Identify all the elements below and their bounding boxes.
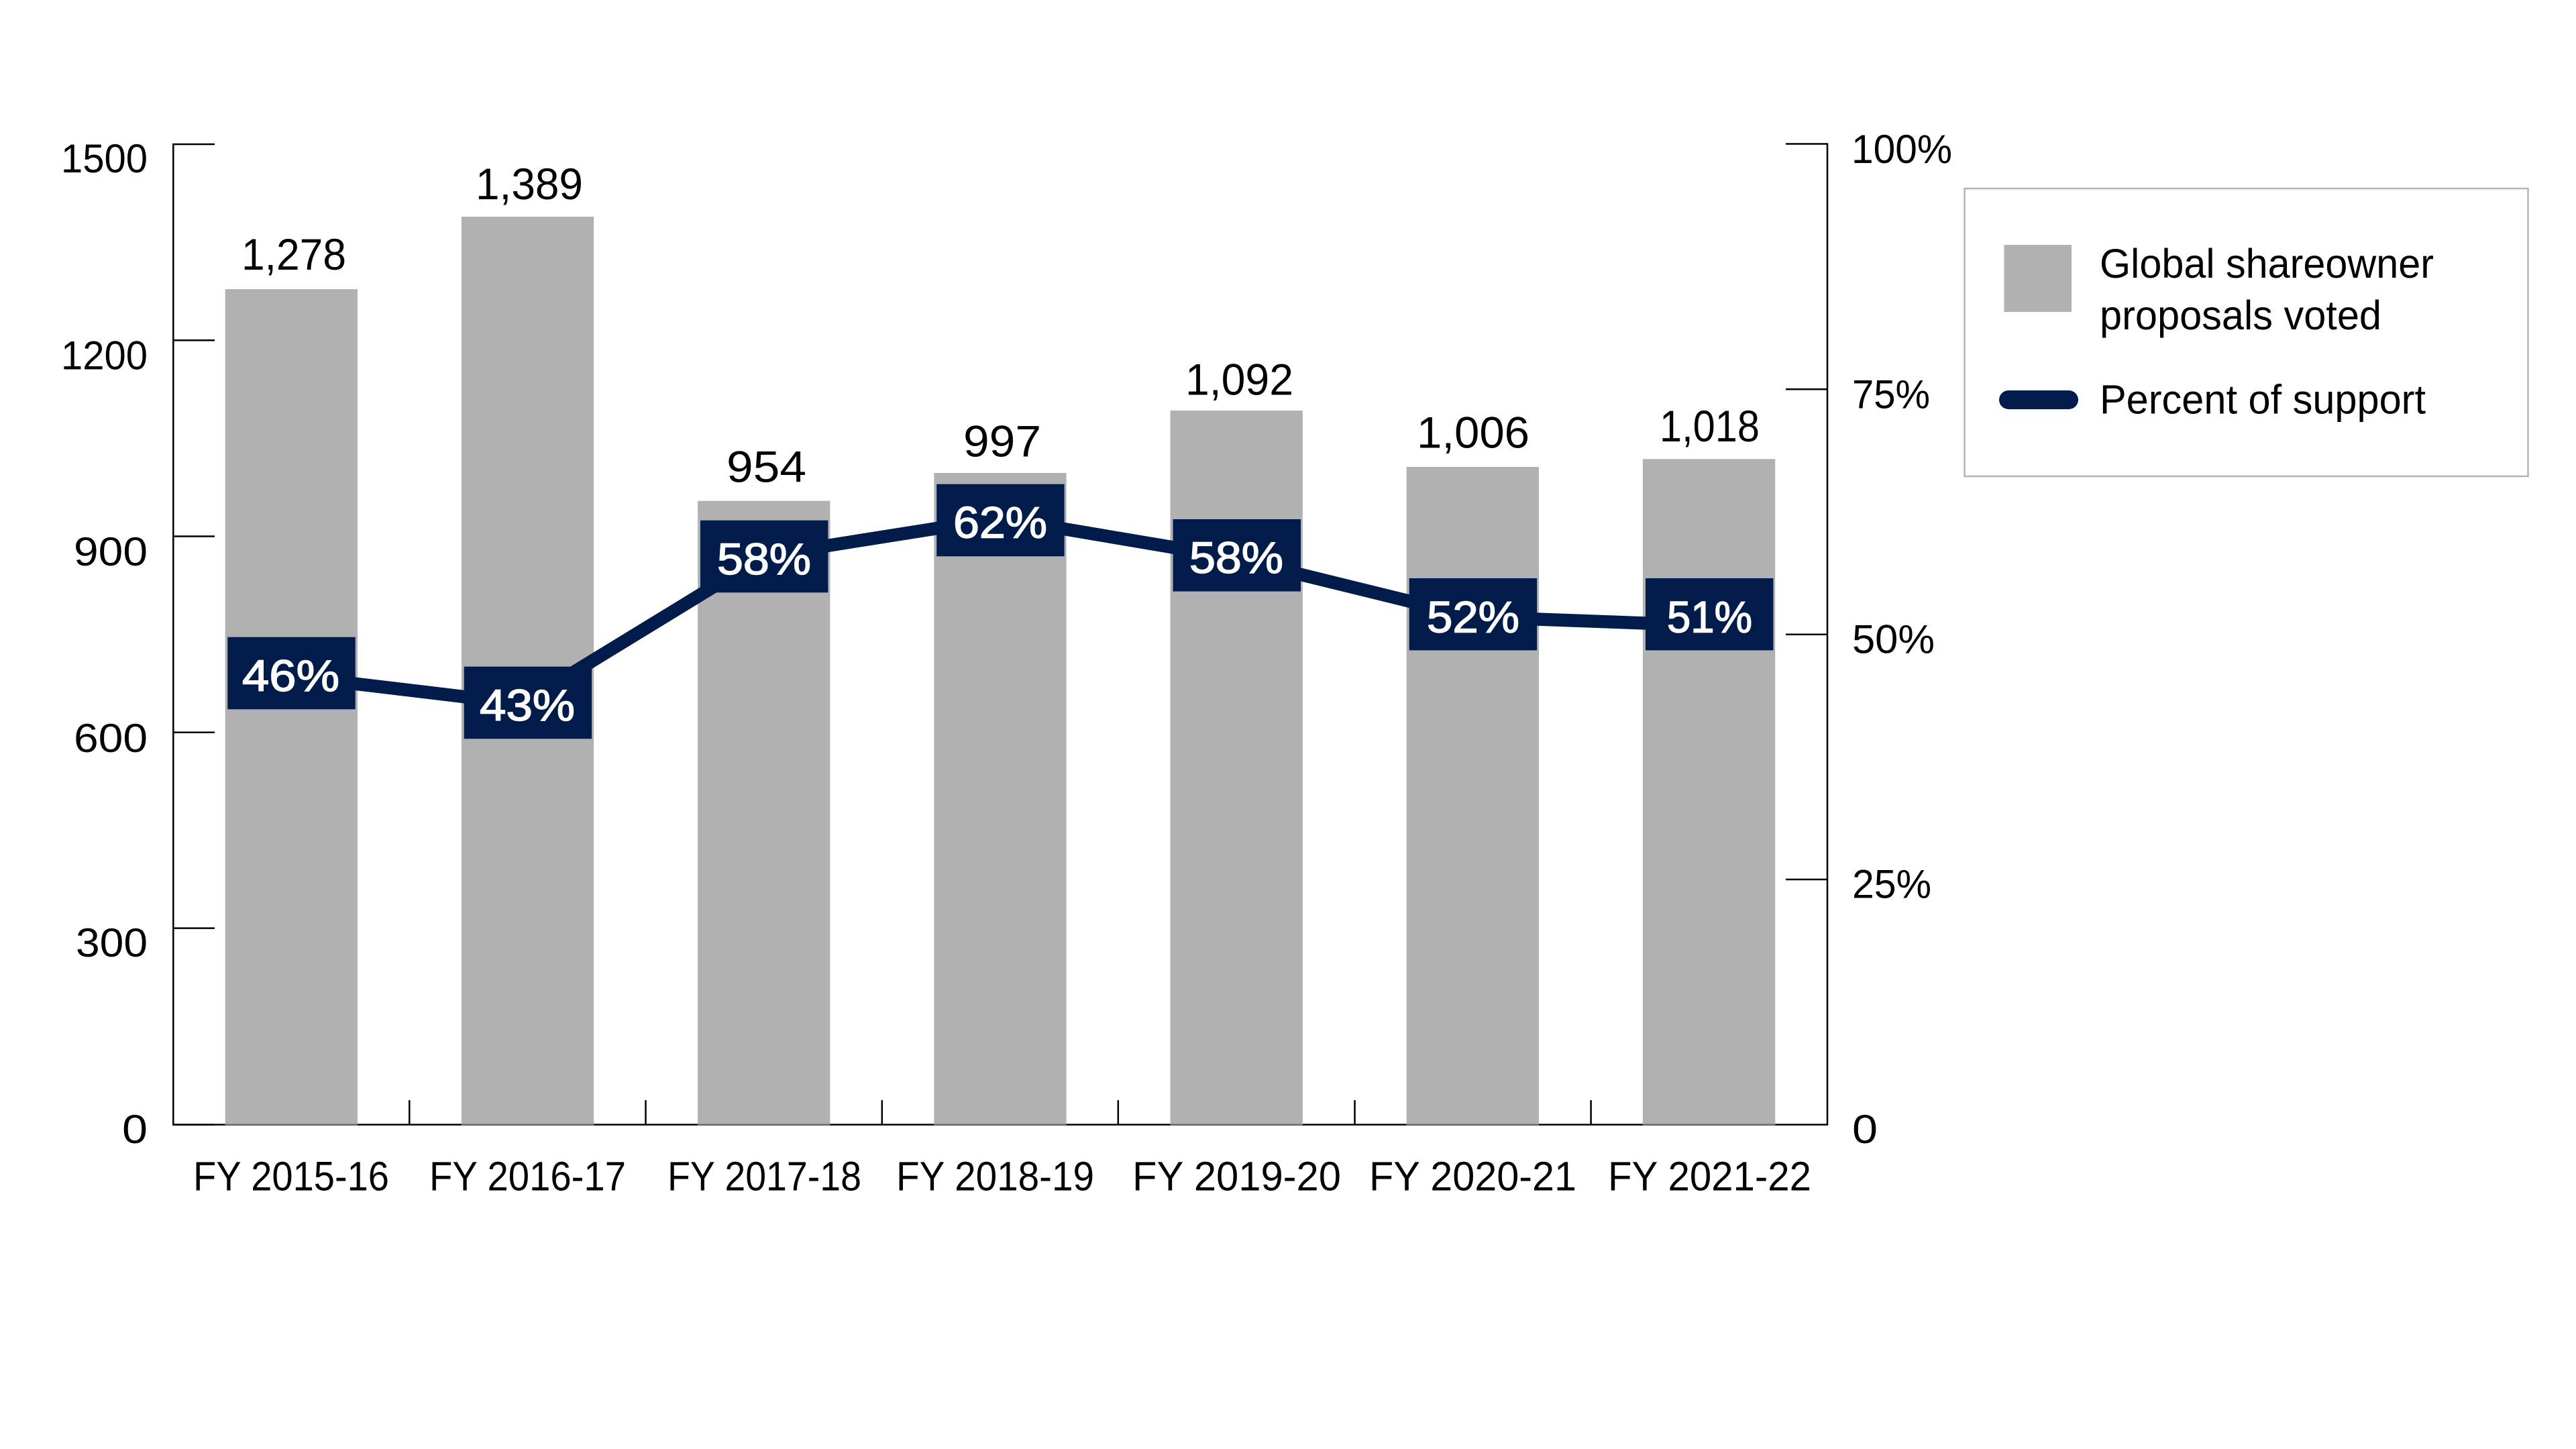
bar value labels: 1,278 [241, 229, 346, 279]
bar value labels: 1,018 [1660, 401, 1760, 451]
left axis labels [61, 136, 148, 1152]
right axis labels: 75% [1852, 372, 1930, 417]
category labels [193, 1153, 1811, 1199]
percent labels: 52% [1427, 592, 1519, 641]
category labels: FY 2015-16 [193, 1153, 389, 1199]
category labels: FY 2019-20 [1132, 1153, 1341, 1199]
legend swatch: line [1999, 390, 2078, 409]
legend label: line: Percent of support [2100, 377, 2426, 423]
percent labels: 43% [480, 680, 575, 730]
category labels: FY 2020-21 [1369, 1153, 1576, 1199]
left axis labels: 1200 [61, 333, 148, 378]
bar value labels: 954 [727, 441, 806, 491]
category labels: FY 2021-22 [1608, 1153, 1811, 1199]
right axis labels: 100% [1851, 127, 1952, 172]
category labels: FY 2016-17 [429, 1153, 626, 1199]
left axis labels: 0 [122, 1107, 148, 1152]
percent labels: 58% [1189, 533, 1283, 582]
left axis labels: 600 [74, 716, 148, 761]
percent labels [242, 498, 1752, 730]
category labels: FY 2017-18 [667, 1153, 861, 1199]
legend label: bars second line: proposals voted [2100, 292, 2381, 338]
bar value labels: 1,389 [476, 159, 583, 209]
bar value labels: 997 [963, 416, 1041, 466]
right axis labels [1851, 127, 1952, 1152]
percent labels: 62% [953, 498, 1047, 547]
right axis labels: 25% [1852, 861, 1931, 906]
percent labels: 46% [242, 651, 339, 700]
legend box [1964, 189, 2528, 476]
category labels: FY 2018-19 [896, 1153, 1094, 1199]
bar value labels: 1,092 [1185, 354, 1293, 404]
left axis labels: 1500 [61, 136, 148, 181]
axes frame and tick marks [173, 144, 1827, 1124]
legend [1964, 189, 2528, 476]
bars: proposals voted by year [225, 217, 1775, 1126]
right axis labels: 0 [1852, 1107, 1878, 1152]
percent data boxes [227, 484, 1773, 739]
left axis labels: 300 [76, 920, 148, 965]
bar value labels: 1,006 [1417, 408, 1529, 458]
percent labels: 58% [717, 534, 811, 584]
right axis labels: 50% [1852, 616, 1935, 661]
baseline shading under bars [225, 1124, 1775, 1126]
line: percent of support [291, 518, 1709, 704]
left axis labels: 900 [74, 529, 148, 574]
percent labels: 51% [1667, 592, 1752, 641]
bar value labels [241, 159, 1760, 491]
legend swatch: bars [2004, 245, 2072, 312]
legend label: bars: Global shareowner [2100, 241, 2434, 286]
